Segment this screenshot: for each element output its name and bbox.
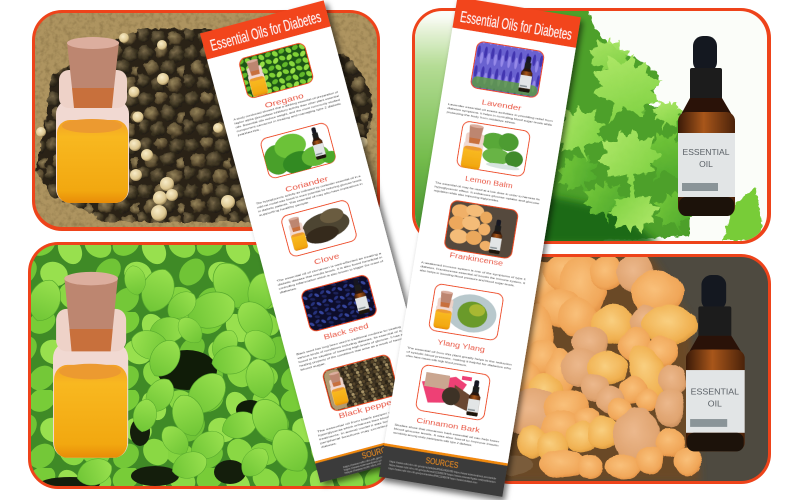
section: oregano: oils. Essential oils reduce weight, and the most commonly studied [235,98,341,129]
section: lavender [446,38,564,131]
section: frankincense: Frankincense [449,250,504,268]
section: black seed: healing property of the conditions that arise as a result of having [299,336,405,368]
section: black seed [281,269,406,372]
left poster header [200,0,331,60]
dropper bottle on coriander panel: ESSENTIAL [682,147,730,157]
jar of oil on pepper panel [56,37,129,203]
section: lemon balm: The essential oil may be used at a low dose in order to harness its [435,180,541,202]
right poster sources footer [379,443,508,497]
section: clove: controlling inflammation which is also known to trigger the onset of [278,259,384,291]
section: black pepper: diabetes. [321,441,337,449]
section: lavender: Lavender essential oil exerts activities in providing relief from [448,102,554,123]
section: oregano: A study conducted showed that a drinking essential oil preparation of [233,90,338,122]
section: black seed: various kinds of conditions including diabetes. Its essential oil is [297,328,403,360]
section: frankincense: also helps in boosting blood pressure and blood sugar levels. [420,268,515,288]
right poster sources footer: https://www.ncbi.nlm.nih.gov/pubmed/12345678 https://www.researchgate.net/publication [389,463,496,484]
section: ylang ylang: often have issues with high blood pressure. [406,353,468,367]
section: ylang ylang [406,284,512,370]
right poster sources footer: https://www.ncbi.nlm.nih.gov/pmc/articles/PMC2345678 https://www.hindawi.com [388,466,478,485]
section: black pepper [302,349,426,449]
section: oregano: Oregano [264,91,305,110]
panel: black pepper photo [30,10,380,231]
section: frankincense [420,200,526,286]
section: black seed: blood sugar. [300,361,326,372]
section: cinnamon bark: sensitivity among study participants with type 2 diabetes. [393,430,473,447]
section: ylang ylang: The essential oil from this plant greatly helps in the reduction [407,346,512,367]
left poster sources footer: https://www.ncbi.nlm.nih.gov/pmc/articles/PMC1234567 [343,445,418,469]
section: cinnamon bark: Cinnamon Bark [416,416,481,435]
right poster header [452,0,581,48]
section: coriander: The hypoglycemic activity as indicated by coriander essential oil in a [255,174,361,206]
left poster sources footer: SOURCES [361,443,396,461]
section: coriander: mild rat model was found to exert potential for reducing glucose levels [257,178,362,210]
section: black seed: found to be capable of lowering high levels of glucose. It has a [298,332,404,364]
section: clove: The essential oil of cinnamon is well-effected as treating a [276,251,382,283]
section: oregano: component carvacrol in treating and managing type 2 diabetic [236,101,342,133]
section: frankincense: A weakened immune system is one of the symptoms of type 1 [421,260,526,281]
section: frankincense: diabetes. Frankincense essential oil boosts the immune system. It [420,264,526,285]
section: oregano: patients. [237,127,262,137]
section: oregano: higher alpha glucosidase inhibitory activity than other plant essential [234,94,340,126]
section: lemon balm: Lemon Balm [465,174,513,190]
dropper bottle on coriander panel [678,36,735,216]
section: black pepper: peripheral functions may contribute to a treatment of [320,413,425,445]
section: black pepper: The essential oil from black pepper can be used in a [317,402,422,434]
left poster sources footer: https://www.ncbi.nlm.nih.gov/pubmed/23456789 [344,451,419,475]
section: clove: Clove [313,251,340,267]
section: clove: diabetic disease that results levels. It is also found beneficial in [277,255,383,287]
section: coriander: in diabetic patients. This essential oil may also have implications in [258,182,363,213]
section: black seed: Black seed [323,321,369,342]
section: lavender: protecting the body from oxidative stress. [446,110,516,125]
section: clove [276,200,384,294]
right poster header: Essential Oils for Diabetes [459,9,573,44]
section: coriander: supporting healthy people. [259,200,310,217]
dropper bottle on frankincense panel: ESSENTIAL [691,387,739,397]
dropper bottle on frankincense panel: OIL [708,399,722,408]
dropper bottle on frankincense panel [686,275,745,451]
section: clove: diabetes. [279,286,298,295]
section: cinnamon bark [393,364,500,446]
section: cinnamon bark: Studies show that cinnamon bark essential oil can help lower [394,423,500,444]
panel: coriander photo [400,0,771,250]
section: cinnamon bark: blood glucose levels. It was also found to improve insulin [394,426,499,448]
section: black pepper: Black pepper [338,397,397,420]
right poster sources footer: SOURCES [425,456,459,470]
section: ylang ylang: Ylang Ylang [437,337,486,354]
left poster sources footer [315,428,444,483]
section: black pepper: hyperglycemia which enhances their blood glucose level in the [318,406,423,438]
section: black seed: Black seed has long been used in traditional medicine for treating [296,325,402,356]
panel: oregano photo [23,242,392,491]
left poster: Essential Oils for Diabetes [200,0,409,489]
section: lavender: diabetes symptoms. It helps in controlling blood sugar levels while [447,106,553,127]
left poster sources footer: https://www.sciencedirect.com/science/article/pii/S0378 [343,448,418,472]
right poster sources footer: https://www.ncbi.nlm.nih.gov/pmc/articles/PMC3456789 https://www.sciencedirect.com/article [389,459,497,481]
panel: frankincense photo [480,251,771,484]
section: ylang ylang: of systolic blood pressure, making it helpful for diabetics who [406,349,512,371]
dropper bottle on coriander panel: OIL [699,159,713,169]
section: lavender: Lavender [481,97,523,113]
jar of oil on oregano panel [53,272,128,458]
section: lemon balm [434,120,540,204]
section: black pepper: treatments. In animal model it was found to control higher [319,410,424,441]
section: lemon balm: regulation while also improving triglycerides. [434,188,500,203]
section: coriander [256,122,363,216]
section: lemon balm: hypoglycemic effect. It enhances glucose uptake and glucose [434,184,540,205]
section: coriander: Coriander [284,174,330,194]
section: oregano [219,37,343,137]
right poster: Essential Oils for Diabetes [379,0,581,497]
